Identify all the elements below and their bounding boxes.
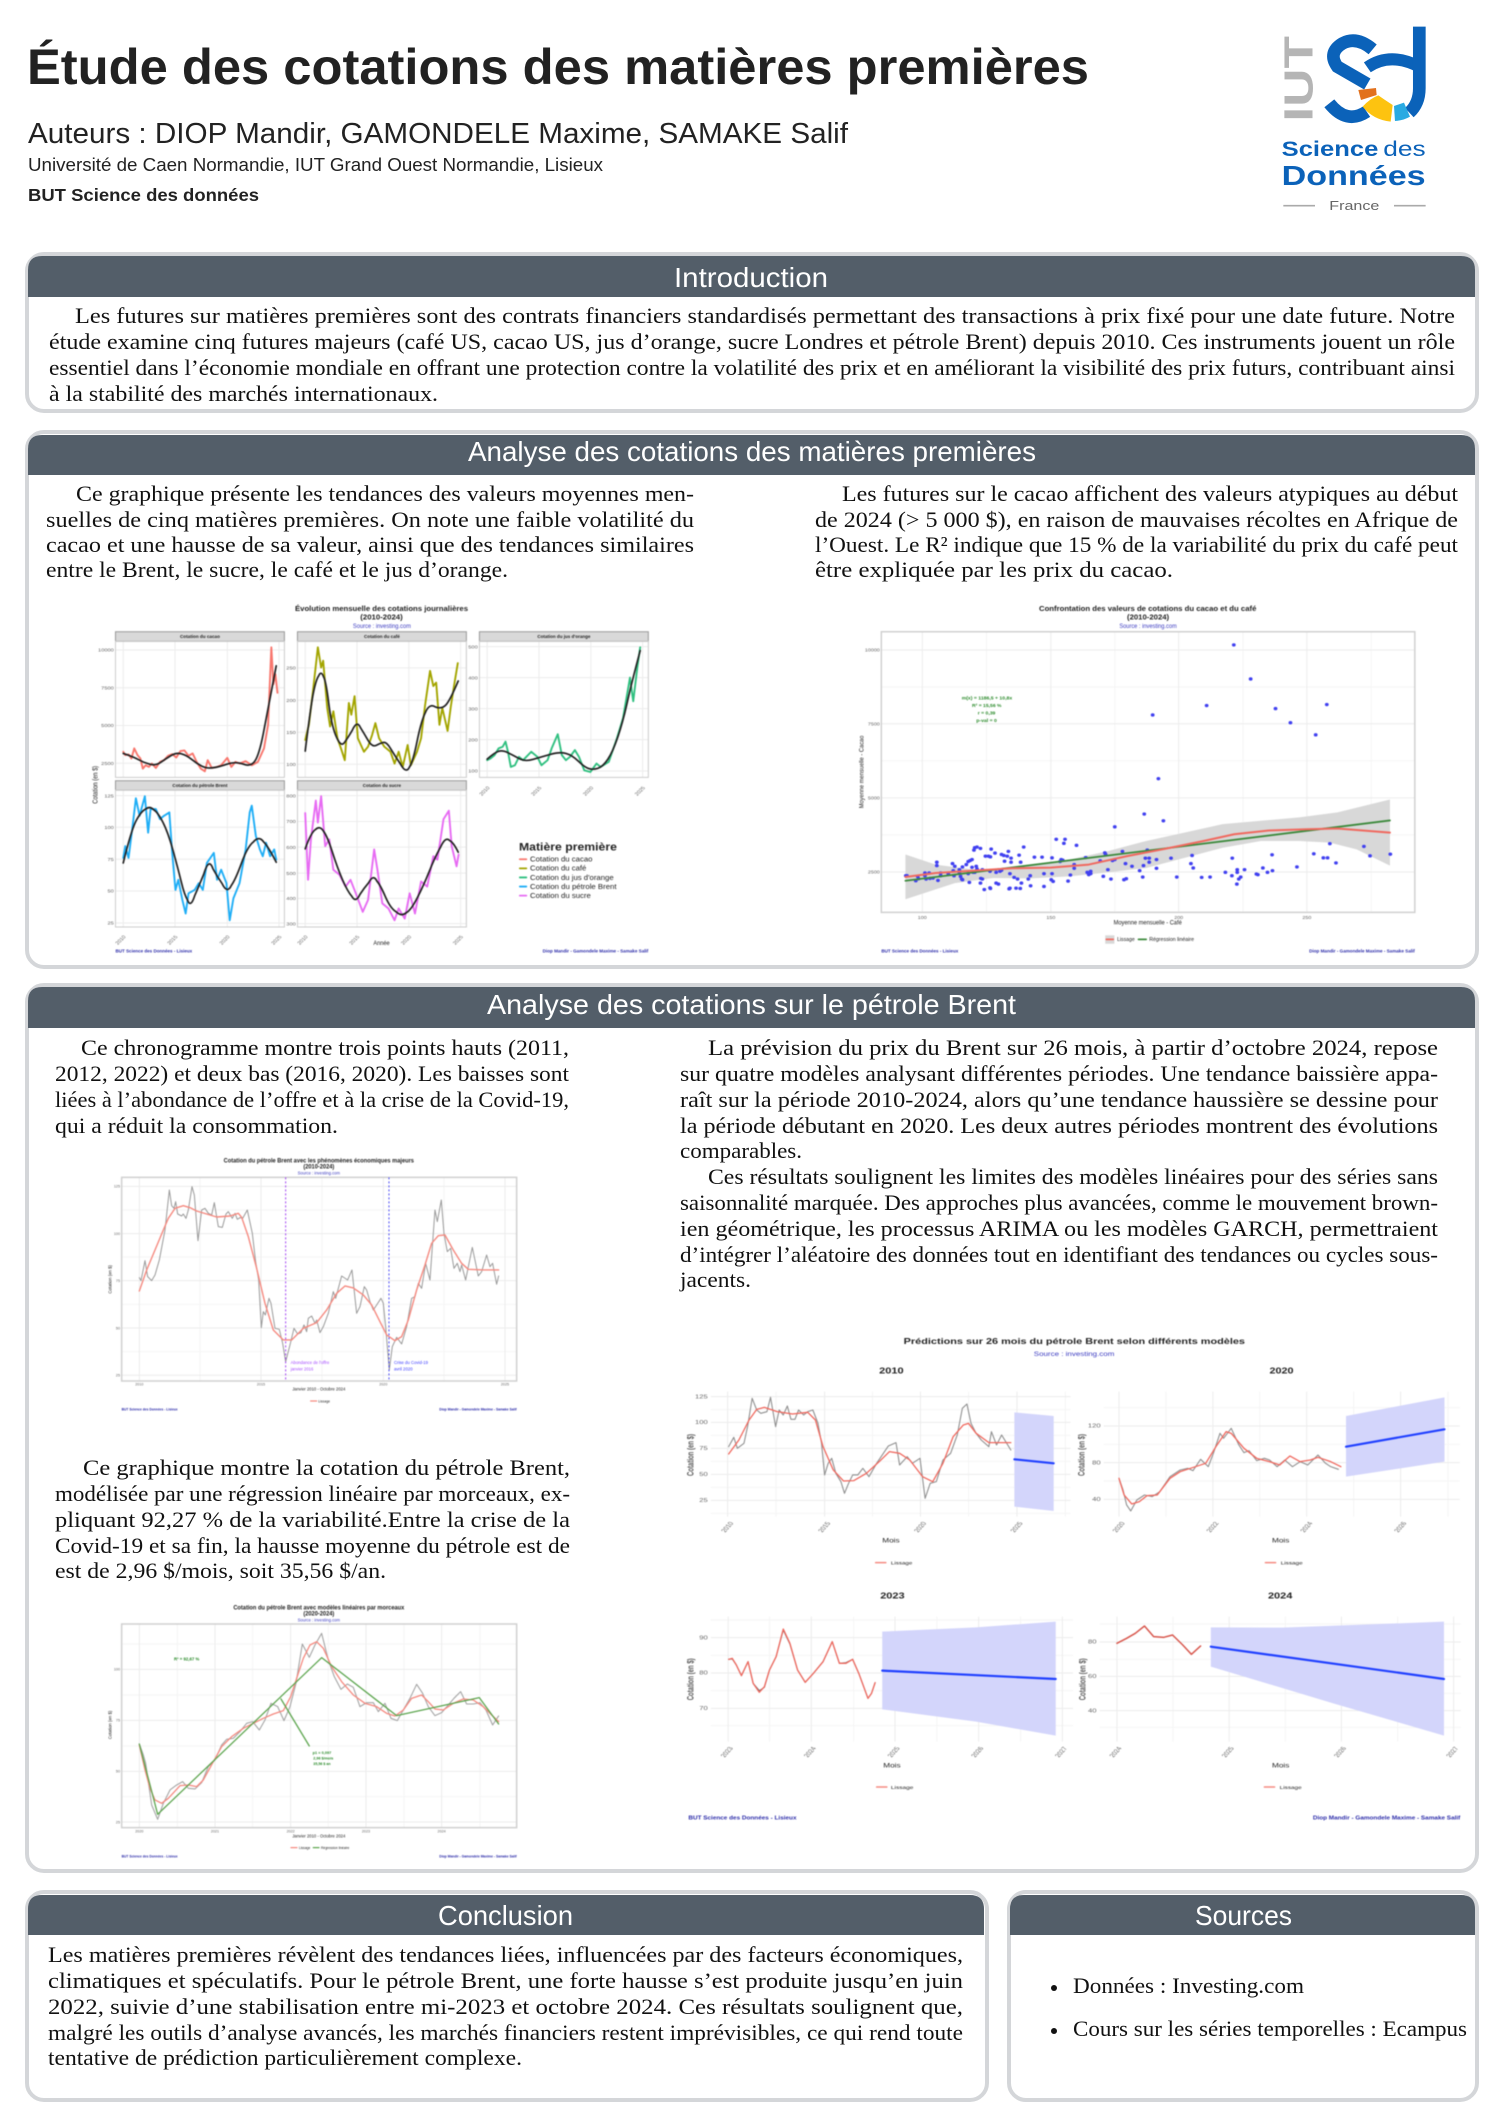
chart: prédictions 2023 et 2024: Mois <box>883 1762 901 1769</box>
chart: prédictions 2010 et 2020: 2026 <box>1393 1521 1409 1533</box>
chart: évolution mensuelle, small multiples: 200 <box>468 738 478 743</box>
panel: introduction <box>27 254 1477 411</box>
logo: IUT Science des Données: Science <box>1282 137 1378 161</box>
chart: scatter cacao vs café: Moyenne mensuelle - Café <box>1114 920 1182 926</box>
chart: évolution mensuelle, small multiples: 2020 <box>219 935 232 946</box>
chart: modèles linéaires par morceaux: 2021 <box>211 1829 219 1833</box>
chart: évolution mensuelle, small multiples: 100 <box>468 769 478 774</box>
text block: prévision: la période débutant en 2020. Les deux autres périodes montrent des évolutions <box>680 1113 1438 1138</box>
chart: évolution mensuelle, small multiples: 100 <box>104 825 114 831</box>
chart: évolution mensuelle, small multiples: 400 <box>286 896 296 902</box>
chart: prédictions 2023 et 2024: 70 <box>699 1706 708 1712</box>
text block: introduction: essentiel dans l’économie mondiale en offrant une protection contre la volatilité des prix et en améliorant la visibilité des prix futurs, contribuant ainsi <box>49 355 1455 380</box>
panel: conclusion <box>27 1892 987 2100</box>
chart: prédictions 2010 et 2020: Mois <box>882 1537 900 1544</box>
chart: évolution mensuelle, small multiples: 150 <box>286 730 296 736</box>
chart: Brent et phénomènes économiques: Source : investing.com <box>298 1171 340 1177</box>
chart: évolution mensuelle, small multiples: 2015 <box>166 935 180 946</box>
text block: right column: Les futures sur le cacao affichent des valeurs atypiques au début <box>842 481 1458 506</box>
chart: prédictions 2010 et 2020: 120 <box>1088 1424 1101 1429</box>
heading: Introduction: Introduction <box>674 262 828 293</box>
chart: évolution mensuelle, small multiples: Matière première <box>519 840 617 853</box>
chart: évolution mensuelle, small multiples: Cotation du cacao <box>180 635 220 640</box>
chart: Brent et phénomènes économiques: Diop Mandir - Gamondele Maxime - Samake Salif <box>439 1408 517 1412</box>
list: sources: Données : Investing.com <box>1073 1973 1304 1998</box>
chart: prédictions 2010 et 2020: 125 <box>695 1394 708 1400</box>
chart: modèles linéaires par morceaux: p1 = 0,097 <box>313 1751 331 1755</box>
chart: prédictions 2023 et 2024: 2024 <box>1108 1746 1124 1758</box>
chart: évolution mensuelle, small multiples: Cotation du pétrole Brent <box>530 882 617 891</box>
chart: prédictions 2010 et 2020 <box>685 1338 1460 1566</box>
chart: évolution mensuelle, small multiples: 500 <box>286 871 296 877</box>
chart: prédictions 2023 et 2024: Cotation (en $) <box>1077 1658 1088 1700</box>
chart: modèles linéaires par morceaux: Régression linéaire <box>321 1846 349 1850</box>
chart: scatter cacao vs café: 5000 <box>868 796 880 801</box>
chart: Brent et phénomènes économiques: 2025 <box>501 1383 509 1387</box>
chart: évolution mensuelle, small multiples: 2025 <box>634 786 647 797</box>
chart: Brent et phénomènes économiques: 2010 <box>135 1383 143 1387</box>
chart: prédictions 2023 et 2024: BUT Science des Données - Lisieux <box>688 1816 797 1821</box>
text block: left column: entre le Brent, le sucre, le café et le jus d’orange. <box>46 557 508 582</box>
text block: régression par morceaux: Covid-19 et sa fin, la hausse moyenne du pétrole est de <box>55 1533 570 1558</box>
chart: prédictions 2010 et 2020: 2022 <box>1205 1521 1221 1533</box>
chart: modèles linéaires par morceaux: Lissage <box>299 1846 310 1850</box>
chart: Brent et phénomènes économiques: Janvier 2010 - Octobre 2024 <box>292 1386 346 1391</box>
chart: Brent et phénomènes économiques: 75 <box>116 1279 120 1283</box>
chart: évolution mensuelle, small multiples: Cotation du cacao <box>530 854 593 863</box>
chart: modèles linéaires par morceaux: R² = 92,67 % <box>174 1657 199 1662</box>
chart: évolution mensuelle, small multiples: 2500 <box>101 761 114 767</box>
chart: prédictions 2010 et 2020: Prédictions sur 26 mois du pétrole Brent selon différents modèles <box>904 1338 1245 1346</box>
chart: prédictions 2010 et 2020: 2010 <box>720 1521 736 1533</box>
chart: modèles linéaires par morceaux: 75 <box>116 1719 120 1723</box>
chart: modèles linéaires par morceaux <box>108 1605 517 1859</box>
text block: conclusion: Les matières premières révèlent des tendances liées, influencées par des facteurs économiques, <box>48 1942 963 1967</box>
chart: prédictions 2023 et 2024: 60 <box>1088 1674 1097 1680</box>
chart: Brent et phénomènes économiques: Crise du Covid-19 <box>394 1360 428 1365</box>
chart: évolution mensuelle, small multiples: Cotation du sucre <box>530 891 591 900</box>
chart: modèles linéaires par morceaux: 2020 <box>135 1829 143 1833</box>
chart: évolution mensuelle, small multiples: Cotation du jus d'orange <box>530 873 614 882</box>
chart: prédictions 2010 et 2020: Source : investing.com <box>1034 1351 1115 1358</box>
chart: évolution mensuelle, small multiples: Cotation du pétrole Brent <box>172 784 228 789</box>
chart: Brent et phénomènes économiques: 25 <box>116 1374 120 1378</box>
chart: modèles linéaires par morceaux: 2023 <box>362 1829 370 1833</box>
text block: chronogramme <box>55 1035 569 1138</box>
chart: prédictions 2010 et 2020: 40 <box>1092 1497 1101 1503</box>
chart: prédictions 2010 et 2020: Mois <box>1272 1537 1289 1544</box>
chart: scatter cacao vs café: 150 <box>1046 915 1056 921</box>
chart: évolution mensuelle, small multiples: 600 <box>286 845 296 851</box>
chart: scatter cacao vs café: (2010-2024) <box>1127 612 1169 622</box>
chart: modèles linéaires par morceaux: 2,96 $/mois <box>313 1756 333 1760</box>
chart: prédictions 2010 et 2020: Lissage <box>891 1561 913 1566</box>
chart: modèles linéaires par morceaux: Janvier 2010 - Octobre 2024 <box>292 1833 346 1838</box>
chart: scatter cacao vs café: 7500 <box>868 722 880 727</box>
chart: scatter cacao vs café: 200 <box>1174 915 1183 921</box>
heading: analyse des cotations: Analyse des cotations des matières premières <box>468 436 1036 467</box>
chart: prédictions 2010 et 2020: 100 <box>695 1420 708 1426</box>
chart: Brent et phénomènes économiques: Lissage <box>318 1399 330 1403</box>
chart: évolution mensuelle, small multiples: 200 <box>286 698 296 704</box>
chart: évolution mensuelle, small multiples: 800 <box>286 794 296 799</box>
header: title and authors <box>27 39 1089 205</box>
chart: Brent et phénomènes économiques: avril 2020 <box>394 1366 413 1371</box>
chart: prédictions 2023 et 2024: 2026 <box>970 1746 986 1758</box>
chart: prédictions 2010 et 2020: 25 <box>699 1498 708 1504</box>
panel: analyse du pétrole Brent <box>27 985 1477 1871</box>
chart: scatter cacao vs café: Régression linéaire <box>1149 937 1194 943</box>
chart: prédictions 2010 et 2020: 75 <box>699 1446 708 1452</box>
chart: évolution mensuelle, small multiples: 2025 <box>452 935 465 946</box>
chart: prédictions 2023 et 2024: Diop Mandir - Gamondele Maxime - Samake Salif <box>1313 1816 1461 1821</box>
chart: prédictions 2023 et 2024: 2023 <box>720 1746 736 1758</box>
chart: Brent et phénomènes économiques <box>108 1158 517 1412</box>
chart: Brent et phénomènes économiques: Abondance de l'offre <box>291 1360 330 1365</box>
logo: IUT Science des Données: France <box>1329 199 1379 213</box>
chart: scatter cacao vs café: 2500 <box>868 870 880 876</box>
chart: Brent et phénomènes économiques: 100 <box>114 1232 120 1236</box>
chart: modèles linéaires par morceaux: (2020-2024) <box>303 1611 334 1617</box>
chart: évolution mensuelle, small multiples: 75 <box>108 857 114 863</box>
chart: évolution mensuelle, small multiples: 2015 <box>348 935 362 946</box>
chart: évolution mensuelle, small multiples: 2010 <box>478 786 492 797</box>
chart: évolution mensuelle, small multiples <box>92 604 649 954</box>
text block: conclusion: climatiques et spéculatifs. Pour le pétrole Brent, une forte hausse s’est produite jusqu’en juin <box>48 1968 963 1993</box>
affiliation: Université de Caen Normandie, IUT Grand Ouest Normandie, Lisieux <box>28 155 603 175</box>
text block: prévision: raît sur la période 2010-2024, alors qu’une tendance haussière se dessine pour <box>680 1087 1439 1112</box>
chart: prédictions 2010 et 2020: 2020 <box>1269 1367 1294 1376</box>
chart: Brent et phénomènes économiques: 50 <box>116 1326 120 1330</box>
chart: modèles linéaires par morceaux: 25 <box>116 1820 120 1824</box>
chart: modèles linéaires par morceaux: 50 <box>116 1770 120 1774</box>
chart: modèles linéaires par morceaux: Cotation (en $) <box>108 1710 113 1739</box>
chart: évolution mensuelle, small multiples: 700 <box>286 820 296 825</box>
chart: évolution mensuelle, small multiples: 2020 <box>582 786 595 797</box>
chart: prédictions 2023 et 2024: 2023 <box>880 1592 905 1601</box>
chart: modèles linéaires par morceaux: Source : investing.com <box>298 1617 340 1623</box>
chart: scatter cacao vs café: r = 0,39 <box>978 711 996 717</box>
panel: analyse des cotations <box>27 432 1477 967</box>
text block: introduction: étude examine cinq futures majeurs (café US, cacao US, jus d’orange, sucre Londres et pétrole Brent) depuis 2010. Ces instruments jouent un rôle <box>49 329 1455 354</box>
chart: évolution mensuelle, small multiples: 7500 <box>101 686 114 691</box>
chart: scatter cacao vs café: Moyenne mensuelle - Cacao <box>858 735 866 808</box>
chart: scatter cacao vs café: 250 <box>1302 915 1312 921</box>
chart: évolution mensuelle, small multiples: Cotation du jus d'orange <box>537 635 590 640</box>
chart: évolution mensuelle, small multiples: 25 <box>108 921 114 926</box>
chart: prédictions 2010 et 2020: 2024 <box>1299 1521 1315 1533</box>
chart: évolution mensuelle, small multiples: 2015 <box>530 786 544 797</box>
text block: introduction: Les futures sur matières premières sont des contrats financiers standardisés permettant des transactions à prix fixé pour une date future. Notre <box>75 303 1455 328</box>
text block: conclusion: tentative de prédiction particulièrement complexe. <box>48 2045 522 2070</box>
chart: prédictions 2010 et 2020: Cotation (en $) <box>685 1434 696 1476</box>
logo: IUT Science des Données <box>1275 27 1426 213</box>
chart: évolution mensuelle, small multiples: 5000 <box>101 724 114 729</box>
chart: scatter cacao vs café: p-val = 0 <box>976 718 997 724</box>
chart: évolution mensuelle, small multiples: Cotation du café <box>364 635 400 640</box>
chart: scatter cacao vs café: Lissage <box>1117 937 1135 943</box>
chart: modèles linéaires par morceaux: Cotation du pétrole Brent avec modèles linéaires par morceaux <box>233 1605 405 1611</box>
chart: évolution mensuelle, small multiples: 400 <box>468 676 478 681</box>
panel: sources <box>1009 1892 1477 2100</box>
chart: prédictions 2023 et 2024: 80 <box>699 1671 708 1676</box>
chart: évolution mensuelle, small multiples: 125 <box>104 794 114 799</box>
chart: prédictions sur 26 mois <box>685 1338 1461 1821</box>
title: Étude des cotations des matières premières <box>27 39 1089 95</box>
heading: sources: Sources <box>1195 1900 1292 1931</box>
text block: left column: suelles de cinq matières premières. On note une faible volatilité du <box>46 507 694 532</box>
text block: left column: Ce graphique présente les tendances des valeurs moyennes men- <box>76 481 694 506</box>
text block: régression par morceaux <box>55 1455 570 1583</box>
chart: évolution mensuelle, small multiples: Année <box>373 941 390 947</box>
chart: prédictions 2023 et 2024: Lissage <box>1280 1786 1302 1791</box>
logo: IUT Science des Données: IUT <box>1275 36 1321 122</box>
chart: prédictions 2023 et 2024: 80 <box>1088 1640 1097 1645</box>
chart: prédictions 2010 et 2020: Lissage <box>1281 1561 1303 1566</box>
text block: régression par morceaux: pliquant 92,27 % de la variabilité.Entre la crise de la <box>55 1507 570 1532</box>
text block: chronogramme: Ce chronogramme montre trois points hauts (2011, <box>81 1035 569 1060</box>
chart: Brent et phénomènes économiques: (2010-2024) <box>303 1164 334 1170</box>
programme: BUT Science des données <box>28 185 259 205</box>
chart: Brent et phénomènes économiques: 2015 <box>257 1383 265 1387</box>
chart: prédictions 2010 et 2020: 80 <box>1092 1460 1101 1466</box>
text block: chronogramme: liées à l’abondance de l’offre et à la crise de la Covid-19, <box>55 1087 569 1112</box>
chart: évolution mensuelle, small multiples: 50 <box>108 889 114 894</box>
chart: évolution mensuelle, small multiples: 500 <box>468 645 478 650</box>
chart: prédictions 2023 et 2024 <box>685 1592 1461 1821</box>
chart: évolution mensuelle, small multiples: 2025 <box>270 935 284 946</box>
chart: évolution mensuelle, small multiples: Cotation (en $) <box>92 766 100 804</box>
text block: prévision: La prévision du prix du Brent sur 26 mois, à partir d’octobre 2024, repose <box>708 1035 1438 1060</box>
chart: Brent et phénomènes économiques: 125 <box>114 1185 120 1189</box>
chart: prédictions 2023 et 2024: 2024 <box>1268 1592 1293 1601</box>
chart: scatter cacao vs café: R² = 15,56 % <box>972 703 1002 709</box>
chart: modèles linéaires par morceaux: 100 <box>114 1668 120 1672</box>
text block: prévision: ien géométrique, les processus ARIMA ou les modèles GARCH, permettraient <box>680 1216 1438 1241</box>
chart: évolution mensuelle, small multiples: 10000 <box>98 648 114 653</box>
chart: évolution mensuelle, small multiples: BUT Science des Données - Lisieux <box>115 949 192 954</box>
text block: right column: être expliquée par les prix du cacao. <box>815 557 1173 582</box>
logo: IUT Science des Données: Données <box>1282 160 1426 191</box>
chart: évolution mensuelle, small multiples: Cotation du café <box>530 864 587 873</box>
text block: régression par morceaux: est de 2,96 $/mois, soit 35,56 $/an. <box>55 1558 386 1583</box>
text block: left column <box>46 481 694 582</box>
chart: prédictions 2023 et 2024: 2025 <box>1221 1746 1237 1758</box>
chart: Brent et phénomènes économiques: Cotation (en $) <box>108 1264 113 1294</box>
chart: évolution mensuelle, small multiples: (2010-2024) <box>360 612 403 621</box>
text block: chronogramme: qui a réduit la consommation. <box>55 1113 338 1138</box>
text block: prévision: sur quatre modèles analysant différentes périodes. Une tendance baissière appa- <box>680 1061 1438 1086</box>
logo: IUT Science des Données: des <box>1383 137 1426 161</box>
chart: évolution mensuelle, small multiples: 300 <box>468 707 478 712</box>
heading: analyse du pétrole Brent: Analyse des cotations sur le pétrole Brent <box>487 989 1016 1020</box>
chart: prédictions 2023 et 2024: Mois <box>1272 1762 1289 1769</box>
chart: évolution mensuelle, small multiples: 100 <box>286 762 296 768</box>
text block: conclusion <box>48 1942 963 2070</box>
chart: prédictions 2010 et 2020: 2025 <box>1009 1521 1025 1533</box>
chart: prédictions 2023 et 2024: 40 <box>1088 1708 1097 1714</box>
chart: évolution mensuelle, small multiples: Évolution mensuelle des cotations journalières <box>295 604 468 613</box>
text block: right column <box>815 481 1458 582</box>
chart: Brent et phénomènes économiques: Cotation du pétrole Brent avec les phénomènes économiques majeurs <box>224 1158 415 1164</box>
chart: Brent et phénomènes économiques: 2020 <box>379 1383 387 1387</box>
chart: prédictions 2023 et 2024: Cotation (en $) <box>685 1658 696 1700</box>
text block: chronogramme: 2012, 2022) et deux bas (2016, 2020). Les baisses sont <box>55 1061 569 1086</box>
chart: modèles linéaires par morceaux: 35,56 $ an <box>313 1762 331 1766</box>
text block: introduction <box>49 303 1455 406</box>
text block: régression par morceaux: modélisée par une régression linéaire par morceaux, ex- <box>55 1481 570 1506</box>
text block: conclusion: malgré les outils d’analyse avancés, les marchés financiers restent imprévisibles, ce qui rend toute <box>48 2020 963 2045</box>
chart: prédictions 2010 et 2020: 2020 <box>913 1521 929 1533</box>
chart: modèles linéaires par morceaux: Diop Mandir - Gamondele Maxime - Samake Salif <box>439 1855 517 1859</box>
chart: prédictions 2010 et 2020: 2010 <box>879 1367 904 1376</box>
chart: prédictions 2023 et 2024: Lissage <box>891 1786 914 1791</box>
text block: prévision: jacents. <box>679 1267 751 1292</box>
text block: prévision <box>679 1035 1439 1292</box>
list: sources <box>1051 1973 1467 2041</box>
chart: évolution mensuelle, small multiples: 2010 <box>297 935 310 946</box>
text block: régression par morceaux: Ce graphique montre la cotation du pétrole Brent, <box>83 1455 570 1480</box>
authors: Auteurs : DIOP Mandir, GAMONDELE Maxime, SAMAKE Salif <box>28 118 849 150</box>
list: sources: Cours sur les séries temporelles : Ecampus <box>1073 2016 1467 2041</box>
chart: prédictions 2010 et 2020: 50 <box>699 1472 708 1478</box>
chart: prédictions 2023 et 2024: 2025 <box>886 1746 902 1758</box>
chart: prédictions 2010 et 2020: 2015 <box>817 1521 833 1533</box>
chart: évolution mensuelle, small multiples: Cotation du sucre <box>363 784 401 789</box>
text block: prévision: comparables. <box>680 1138 802 1163</box>
chart: prédictions 2023 et 2024: 2027 <box>1445 1746 1461 1758</box>
text block: introduction: à la stabilité des marchés internationaux. <box>49 381 438 406</box>
chart: évolution mensuelle, small multiples: Source : investing.com <box>353 622 411 630</box>
chart: évolution mensuelle, small multiples: Diop Mandir - Gamondele Maxime - Samake Salif <box>543 949 649 954</box>
chart: scatter cacao vs café: 10000 <box>865 648 880 654</box>
chart: Brent et phénomènes économiques: janvier 2016 <box>290 1366 314 1371</box>
chart: scatter cacao vs café: BUT Science des Données - Lisieux <box>881 949 958 954</box>
chart: prédictions 2023 et 2024: 2027 <box>1054 1746 1070 1758</box>
chart: prédictions 2010 et 2020: Cotation (en $) <box>1076 1434 1087 1476</box>
text block: prévision: d’intégrer l’aléatoire des données tout en identifiant des tendances ou cycles sous- <box>680 1242 1438 1267</box>
text block: right column: de 2024 (> 5 000 $), en raison de mauvaises récoltes en Afrique de <box>815 507 1458 532</box>
text block: conclusion: 2022, suivie d’une stabilisation entre mi-2023 et octobre 2024. Ces résultats soulignent que, <box>48 1994 963 2019</box>
chart: scatter cacao vs café: 100 <box>918 915 927 921</box>
chart: scatter cacao vs café: m(x) = 1186,5 + 10,8x <box>962 696 1012 701</box>
chart: Brent et phénomènes économiques: BUT Science des Données - Lisieux <box>122 1408 178 1412</box>
chart: modèles linéaires par morceaux: 2022 <box>287 1829 295 1833</box>
text block: right column: l’Ouest. Le R² indique que 15 % de la variabilité du prix du café peut <box>815 532 1458 557</box>
chart: évolution mensuelle, small multiples: 2020 <box>400 935 413 946</box>
chart: prédictions 2023 et 2024: 2024 <box>803 1746 819 1758</box>
text block: left column: cacao et une hausse de sa valeur, ainsi que des tendances similaires <box>46 532 694 557</box>
chart: modèles linéaires par morceaux: BUT Science des Données - Lisieux <box>122 1855 178 1859</box>
heading: conclusion: Conclusion <box>438 1900 573 1931</box>
chart: évolution mensuelle, small multiples: 2010 <box>115 935 128 946</box>
text block: prévision: saisonnalité marquée. Des approches plus avancées, comme le mouvement brown- <box>680 1190 1438 1215</box>
chart: prédictions 2023 et 2024: 2026 <box>1333 1746 1349 1758</box>
chart: prédictions 2023 et 2024: 90 <box>699 1635 708 1641</box>
chart: scatter cacao vs café: Confrontation des valeurs de cotations du cacao et du café <box>1039 603 1257 613</box>
chart: modèles linéaires par morceaux: 2024 <box>438 1829 446 1833</box>
chart: scatter cacao vs café: Diop Mandir - Gamondele Maxime - Samake Salif <box>1309 949 1415 954</box>
text block: prévision: Ces résultats soulignent les limites des modèles linéaires pour des séries sans <box>708 1164 1438 1189</box>
chart: évolution mensuelle, small multiples: 250 <box>286 666 296 671</box>
chart: scatter cacao vs café: Source : investing.com <box>1119 622 1177 630</box>
chart: évolution mensuelle, small multiples: 300 <box>286 922 296 927</box>
chart: scatter cacao vs café <box>858 603 1415 954</box>
chart: prédictions 2010 et 2020: 2020 <box>1111 1521 1127 1533</box>
